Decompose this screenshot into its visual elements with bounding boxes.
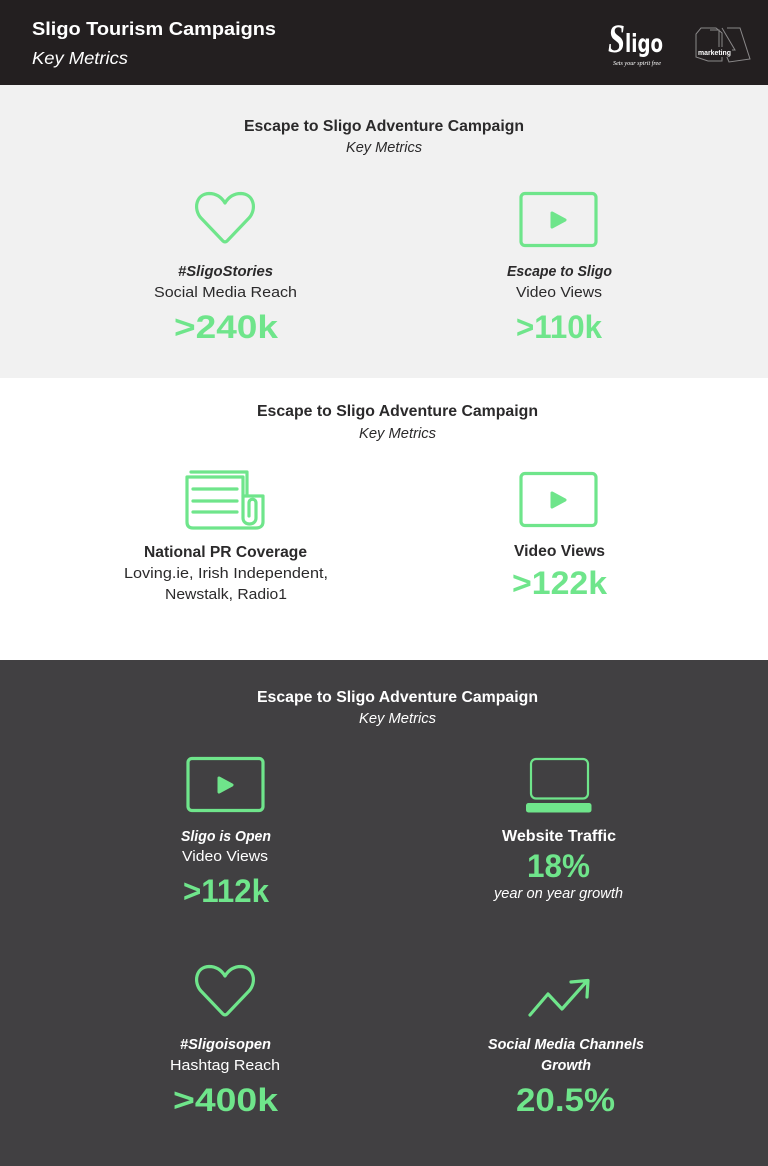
logo: Sligo: ligo (625, 29, 663, 58)
number: 20.5 percent: 20.5% (516, 1082, 615, 1118)
text: Sligo is Open label: Sligo is Open (181, 829, 271, 845)
panel subheading: Key Metrics (359, 711, 436, 727)
icon: growth arrow (530, 980, 588, 1015)
number: 112k: >112k (183, 873, 269, 909)
panel subheading: Key Metrics (346, 140, 422, 156)
panel heading: Escape to Sligo Adventure Campaign (244, 118, 524, 135)
number: 110k: >110k (516, 309, 602, 345)
number: 18 percent: 18% (527, 848, 590, 884)
icon: video player (188, 758, 263, 810)
icon: heart (197, 194, 253, 242)
header subtitle: Key Metrics (32, 48, 128, 68)
logo: CUA marketing: marketing (698, 48, 731, 57)
header title: Sligo Tourism Campaigns (32, 18, 276, 39)
icon: laptop (526, 759, 592, 812)
icon: video player (521, 474, 596, 526)
number: 240k: >240k (174, 309, 278, 345)
icon: newspaper (187, 472, 263, 528)
header band (0, 0, 768, 85)
text: outlets line 1: Loving.ie, Irish Independent, (124, 565, 328, 582)
text: Sligoisopen label: #Sligoisopen (180, 1037, 271, 1053)
panel: Sligo is Open campaign (0, 660, 768, 1166)
logo: CUA marketing (696, 28, 750, 62)
logo: Sligo (608, 16, 663, 67)
text: Hashtag Reach: Hashtag Reach (170, 1057, 280, 1074)
text: Website Traffic: Website Traffic (502, 828, 616, 845)
logo: Sligo: Sets your spirit free (613, 60, 661, 67)
text: Growth: Growth (541, 1058, 591, 1074)
panel subheading: Key Metrics (359, 426, 436, 442)
text: Social Media Reach: Social Media Reach (154, 284, 297, 301)
text: Social Media Channels: Social Media Channels (488, 1037, 644, 1053)
logo: Sligo: S (608, 16, 625, 61)
text: Escape to Sligo label: Escape to Sligo (507, 264, 612, 280)
panel heading: Escape to Sligo Adventure Campaign (257, 689, 538, 706)
text: year on year growth: year on year growth (493, 886, 623, 902)
text: Video Views: Video Views (514, 543, 605, 560)
icon: video player (521, 194, 596, 246)
panel heading: Escape to Sligo Adventure Campaign (257, 403, 538, 420)
number: 400k: >400k (173, 1082, 278, 1118)
text: National PR Coverage: National PR Coverage (144, 544, 307, 561)
text: outlets line 2: Newstalk, Radio1 (165, 586, 287, 603)
text: SligoStories label: #SligoStories (178, 264, 273, 280)
text: Video Views: Video Views (516, 284, 602, 301)
icon: heart (197, 966, 253, 1015)
text: Video Views: Video Views (182, 848, 268, 865)
panel: PR coverage and video views (0, 378, 768, 660)
number: 122k: >122k (512, 565, 607, 601)
panel: Escape to Sligo campaign (0, 85, 768, 378)
